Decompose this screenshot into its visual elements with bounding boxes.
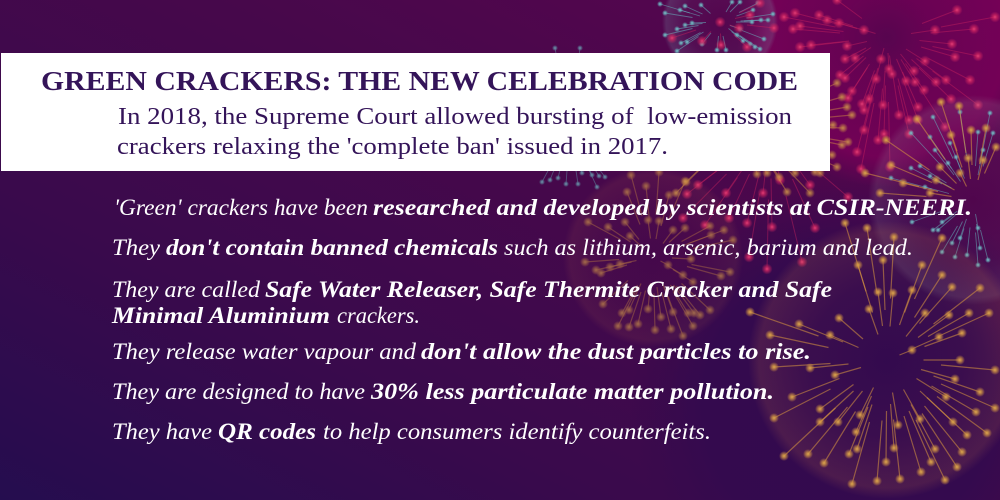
dark halo behind lower-right firework <box>630 180 1000 500</box>
fact: cracker names: They are called <box>112 277 261 302</box>
fact: cracker names: crackers. <box>337 303 420 328</box>
fact: less pollution: They are designed to have <box>112 379 365 404</box>
firework: teal burst top <box>660 0 778 80</box>
firework: pink burst behind panel <box>683 130 848 269</box>
fact: research origin: researched and developed by scientists at CSIR-NEERI. <box>373 195 972 220</box>
fact: cracker names: Safe Water Releaser, Safe Thermite Cracker and Safe <box>265 277 832 302</box>
fact: no banned chemicals: such as lithium, arsenic, barium and lead. <box>504 235 913 260</box>
fact: research origin: 'Green' crackers have been <box>114 195 368 220</box>
subtitle text <box>117 104 792 160</box>
firework: large gold burst bottom right <box>748 221 1000 499</box>
fact: less pollution: 30% less particulate matter pollution. <box>370 379 774 404</box>
glow: magenta behind top right firework <box>737 0 1000 187</box>
fact: water vapour: don't allow the dust particles to rise. <box>421 339 811 364</box>
text block: facts list <box>111 195 972 444</box>
fact: QR codes: They have <box>112 419 212 444</box>
firework: teal and gold burst at right edge <box>865 95 1000 305</box>
panel: white header <box>1 53 830 171</box>
fact: water vapour: They release water vapour and <box>112 339 417 364</box>
fact: cracker names: Minimal Aluminium <box>111 303 330 328</box>
firework: small gold burst behind text <box>563 167 743 347</box>
fact: no banned chemicals: They <box>112 235 161 260</box>
title: GREEN CRACKERS: THE NEW CELEBRATION CODE <box>41 66 798 96</box>
subtitle text: In 2018, the Supreme Court allowed bursting of low-emission <box>118 104 792 130</box>
firework: gold burst behind panel <box>676 83 852 193</box>
fact: no banned chemicals: don't contain banned chemicals <box>166 235 498 260</box>
fact: QR codes: to help consumers identify counterfeits. <box>323 419 711 444</box>
subtitle text: crackers relaxing the 'complete ban' issued in 2017. <box>117 134 668 160</box>
fact: QR codes: QR codes <box>218 419 316 444</box>
firework: large pink burst top right <box>784 0 995 169</box>
fact: cracker names <box>111 277 832 328</box>
firework: teal burst behind panel left <box>542 48 605 187</box>
